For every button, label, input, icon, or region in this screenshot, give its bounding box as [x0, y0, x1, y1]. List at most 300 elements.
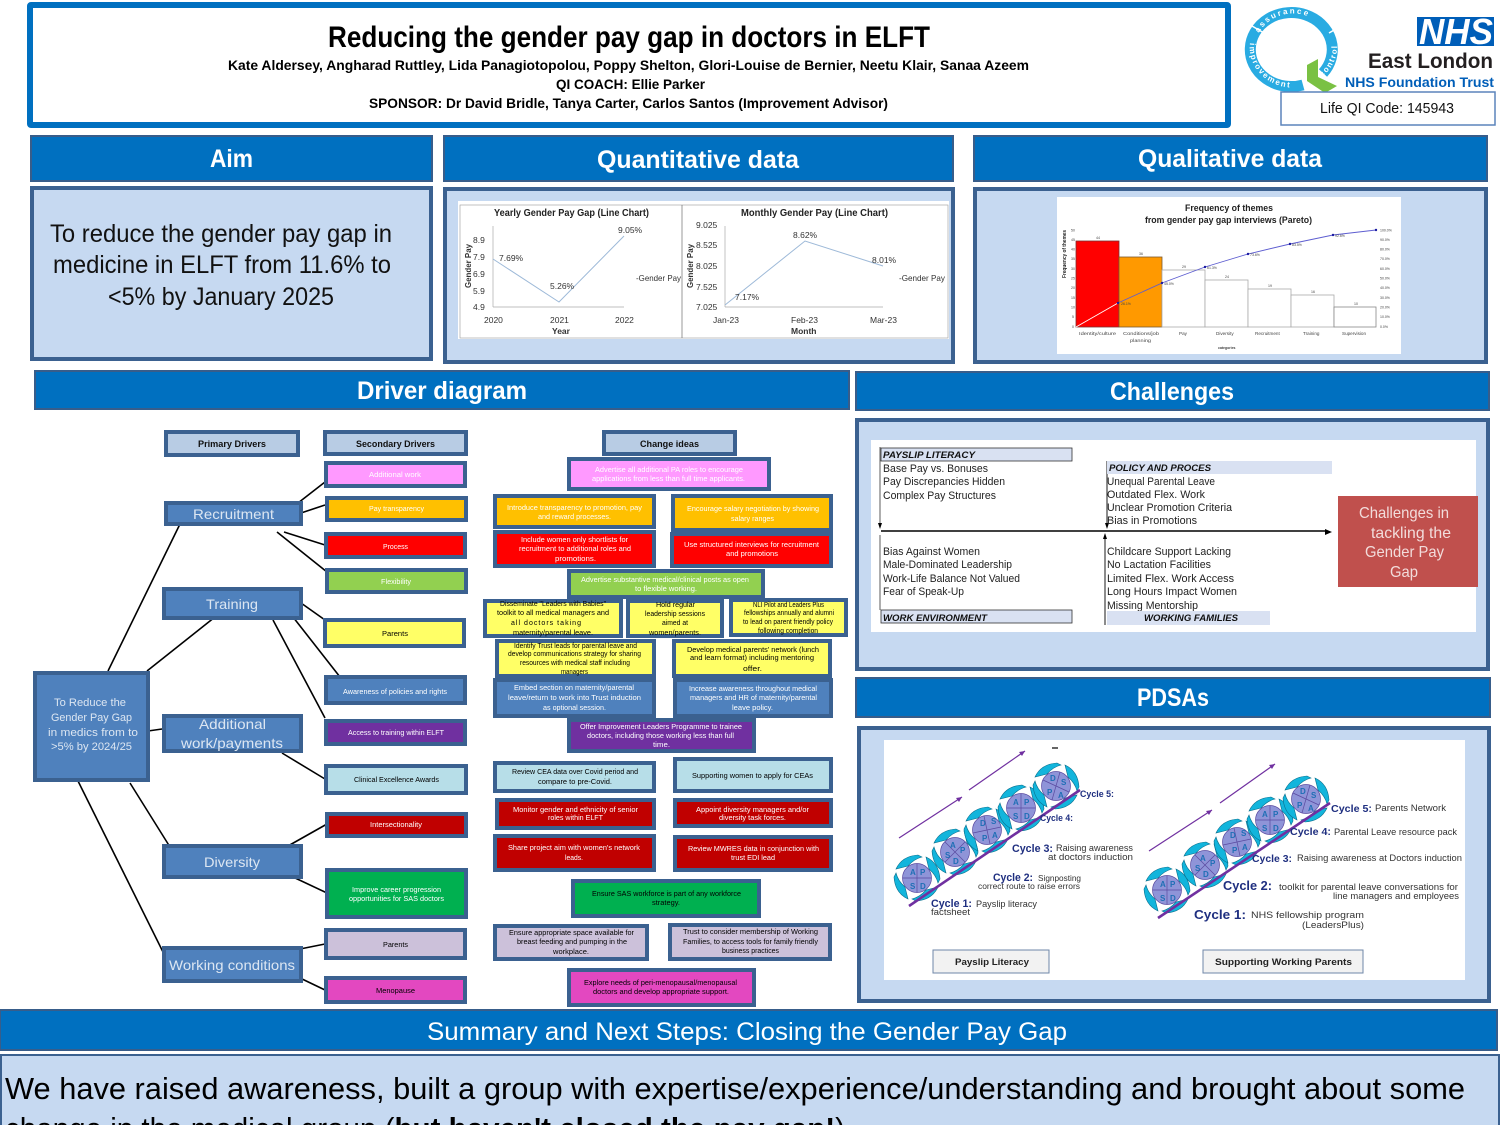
idea: share project aim [495, 836, 654, 870]
QI coach: QI COACH: Ellie Parker [556, 76, 706, 92]
aim statement: <5% by January 2025 [108, 283, 334, 311]
aim statement: medicine in ELFT from 11.6% to [53, 251, 391, 279]
cycle labels: working parents [1194, 803, 1462, 930]
summary text [5, 1071, 1465, 1125]
list: working families: Long Hours Impact Women [1107, 586, 1237, 598]
aim statement: To reduce the gender pay gap in [50, 220, 392, 248]
idea: diversity managers [675, 800, 831, 826]
pareto chart: 20.0% [1380, 306, 1390, 310]
idea: parents network: Develop medical parents' network (lunch [687, 647, 819, 654]
logo: quality assurance ring [1244, 7, 1338, 92]
list: work environment [883, 546, 1020, 598]
PDSA ramp: payslip literacy: A [1058, 791, 1064, 800]
idea: transparency: and reward processes. [538, 514, 611, 521]
driver: recruitment [166, 503, 301, 524]
driver: recruitment: Recruitment [193, 506, 274, 522]
callout: challenges: Gap [1390, 564, 1418, 581]
idea: fellowships: fellowships annually and alumni [744, 610, 834, 617]
Life QI code box: Life QI Code: 145943 [1320, 101, 1454, 117]
pareto chart: 10 [1354, 302, 1358, 306]
goal box: Gender Pay Gap [51, 712, 132, 724]
idea: supporting women CEAs [675, 759, 831, 791]
idea: flexible working: Advertise substantive medical/clinical posts as open [581, 577, 749, 584]
idea: salary negotiation [673, 496, 831, 530]
awareness of policies: Awareness of policies and rights [343, 689, 448, 696]
PDSA ramp: payslip literacy: P [960, 846, 966, 855]
pareto chart: 92.6% [1335, 234, 1345, 238]
callout: challenges: Challenges in [1359, 505, 1449, 522]
heading: challenges: Challenges [1110, 378, 1234, 406]
idea: flexible working: to flexible working. [635, 586, 697, 593]
pareto chart: 30 [1071, 267, 1075, 271]
header: primary drivers: Primary Drivers [198, 439, 266, 450]
list: working families: No Lactation Facilities [1107, 559, 1211, 571]
summary text: We have raised awareness, built a group with expertise/experience/understanding and brought about some [5, 1071, 1465, 1106]
PDSA ramp: payslip literacy: D [980, 819, 986, 828]
idea: structured interviews: Use structured interviews for recruitment [684, 542, 819, 549]
logo: NHS East London: NHS Foundation Trust [1345, 74, 1494, 90]
idea: identify trust leads: resources with medical staff including [520, 660, 630, 667]
pareto chart: 36 [1139, 252, 1143, 256]
line chart: yearly gender pay gap: 9.05% [618, 225, 643, 235]
PDSA ramp: supporting working parents: A [1200, 854, 1206, 863]
heading: challenges [856, 372, 1489, 410]
panel: qualitative data [974, 136, 1487, 362]
idea: monitor gender: Monitor gender and ethnicity of senior [513, 807, 639, 814]
pareto chart: 24 [1225, 275, 1229, 279]
idea: menopause: Explore needs of peri-menopausal/menopausal [584, 980, 737, 987]
idea: share project aim: Share project aim with women's network [508, 845, 641, 852]
cycle labels: payslip literacy: Payslip literacy [976, 899, 1037, 909]
idea: breast feeding space: workplace. [552, 949, 589, 956]
logo: NHS East London: East London [1368, 50, 1493, 73]
pareto chart: Training [1303, 331, 1320, 336]
awareness of policies [326, 677, 465, 703]
pareto chart: Frequency of themes [1062, 230, 1068, 278]
button: supporting working parents: Supporting Working Parents [1215, 957, 1352, 968]
list: payslip literacy: Complex Pay Structures [883, 490, 996, 502]
heading: qualitative [974, 136, 1487, 181]
improve career progression [327, 870, 466, 917]
pareto chart: 29 [1182, 265, 1186, 269]
primary drivers [164, 432, 301, 981]
line chart: yearly gender pay gap: 2020 [484, 315, 503, 325]
title: Reducing the gender pay gap in doctors in ELFT [328, 21, 930, 54]
process: Process [383, 544, 408, 551]
idea: working families [670, 925, 830, 959]
heading: qualitative: Qualitative data [1138, 145, 1323, 173]
idea: SAS workforce: Ensure SAS workforce is part of any workforce [592, 891, 741, 898]
callout: challenges [1338, 496, 1478, 587]
panel: summary and next steps [0, 1010, 1499, 1125]
sponsor: SPONSOR: Dr David Bridle, Tanya Carter, Carlos Santos (Improvement Advisor) [369, 95, 888, 111]
callout: challenges: tackling the [1371, 525, 1451, 542]
idea: CEA data: compare to pre-Covid. [538, 779, 612, 786]
list: work environment: Work-Life Balance Not Valued [883, 573, 1020, 585]
pareto chart: 61.3% [1207, 266, 1217, 270]
panel: driver diagram [35, 371, 849, 1005]
category: policy and proces: POLICY AND PROCES [1109, 463, 1212, 474]
process [326, 534, 465, 557]
Life QI code box [1281, 92, 1495, 125]
list: policy and process [1107, 476, 1233, 527]
improve career progression: Improve career progression [352, 887, 441, 894]
idea: leaders with babies: all doctors taking [511, 620, 581, 627]
logo: NHS East London [1345, 11, 1494, 90]
line chart: monthly gender pay: Feb-23 [791, 315, 818, 325]
category: work environment [881, 610, 1072, 624]
cycle labels: payslip literacy: Cycle 1: [931, 898, 972, 910]
pareto chart: 83.5% [1292, 243, 1302, 247]
idea: leaders with babies [485, 601, 621, 637]
idea: flexible working [569, 571, 763, 597]
pareto chart: Supervision [1342, 331, 1366, 336]
line chart: monthly gender pay: Mar-23 [870, 315, 897, 325]
idea: leaders with babies: maternity/parental leave. [513, 630, 593, 637]
change ideas [485, 432, 846, 1005]
pareto chart: Conditions/job [1123, 331, 1160, 336]
PDSA ramp: payslip literacy: D [953, 857, 959, 866]
header: primary drivers [166, 432, 298, 455]
logo: quality assurance ring: assurance [1256, 9, 1308, 32]
PDSA ramp: payslip literacy: P [1024, 798, 1030, 807]
category: policy and proces [1107, 461, 1332, 474]
cycle labels: payslip literacy: correct route to raise errors [978, 882, 1080, 891]
idea: women only shortlists: promotions. [555, 556, 596, 563]
menopause: Menopause [376, 988, 415, 995]
idea: diversity managers: Appoint diversity managers and/or [696, 807, 810, 814]
driver: additional work/payments: Additional [199, 716, 266, 732]
idea: identify trust leads [497, 641, 654, 676]
category: working families [1107, 611, 1270, 625]
idea: advertise PA roles: applications from less than full time applicants. [592, 476, 745, 483]
driver: additional work/payments: work/payments [180, 735, 283, 751]
PDSA ramp: supporting working parents [1144, 764, 1462, 973]
list: working families: Childcare Support Lacking [1107, 546, 1231, 558]
idea: CEA data [495, 763, 654, 791]
additional work [326, 463, 465, 486]
idea: improvement leaders: doctors, including those working less than full [587, 733, 734, 740]
idea: advertise PA roles: Advertise all additional PA roles to encourage [595, 467, 743, 474]
PDSA ramp: supporting working parents: S [1262, 824, 1268, 833]
pareto chart: 40 [1071, 248, 1075, 252]
idea: identify trust leads: develop communications strategy for sharing [508, 651, 641, 658]
list: work environment: Fear of Speak-Up [883, 586, 964, 598]
cycle labels: payslip literacy: at doctors induction [1048, 852, 1133, 862]
pareto chart: 73.6% [1250, 253, 1260, 257]
PDSA ramp: supporting working parents: A [1242, 843, 1248, 852]
callout: challenges: Gender Pay [1365, 544, 1444, 561]
category: payslip literacy [881, 448, 1072, 461]
idea: menopause [569, 970, 754, 1005]
list: payslip literacy: Base Pay vs. Bonuses [883, 463, 988, 475]
pareto chart: 80.0% [1380, 248, 1390, 252]
PDSA ramp: payslip literacy: P [982, 834, 988, 843]
driver: training: Training [206, 596, 258, 612]
panel: challenges [856, 372, 1489, 669]
PDSA ramp: supporting working parents: P [1273, 810, 1279, 819]
idea: transparency [495, 496, 654, 527]
cycle labels: payslip literacy: Signposting [1038, 874, 1081, 883]
pareto chart: 35 [1071, 257, 1075, 261]
list: working families [1107, 546, 1237, 612]
idea: women only shortlists: Include women only shortlists for [521, 537, 629, 544]
PDSA ramp: supporting working parents: D [1300, 787, 1306, 796]
PDSA ramp: payslip literacy: S [945, 851, 951, 860]
line chart: monthly gender pay: -Gender Pay [899, 273, 946, 283]
idea: CEA data: Review CEA data over Covid period and [512, 769, 638, 776]
PDSA ramp: supporting working parents: D [1273, 824, 1279, 833]
idea: working families: Trust to consider membership of Working [683, 929, 818, 936]
line chart: yearly gender pay gap: 2021 [550, 315, 569, 325]
idea: salary negotiation: salary ranges [731, 516, 775, 523]
pareto chart: 50.0% [1380, 276, 1390, 280]
authors: Kate Aldersey, Angharad Ruttley, Lida Panagiotopolou, Poppy Shelton, Glori-Louise de Bernier, Neetu Klair, Sanaa Azeem [228, 57, 1029, 73]
heading: PDSAs [856, 678, 1490, 717]
goal box [35, 673, 148, 780]
PDSA ramp: payslip literacy: D [920, 882, 926, 891]
PDSA ramp: supporting working parents: D [1170, 894, 1176, 903]
heading: aim [31, 136, 432, 181]
cycle labels: working parents: Cycle 4: [1290, 827, 1331, 838]
pareto chart: 100.0% [1380, 228, 1392, 232]
pareto chart [1062, 203, 1392, 350]
idea: improvement leaders: time. [653, 742, 670, 749]
parents (working conditions) [326, 930, 465, 958]
list: working families: Missing Mentorship [1107, 600, 1198, 612]
parents: Parents [382, 631, 409, 638]
PDSA ramp: payslip literacy: A [992, 831, 998, 840]
idea: monitor gender: roles within ELFT [548, 815, 604, 822]
idea: increase awareness: managers and HR of maternity/parental [690, 695, 817, 702]
pareto chart: Identity/culture [1079, 331, 1117, 336]
clinical excellence awards [326, 766, 466, 793]
pareto chart: 45 [1071, 238, 1075, 242]
line chart: monthly gender pay: 7.525 [696, 282, 718, 292]
heading: quantitative: Quantitative data [597, 146, 800, 174]
pareto chart: 45.0% [1164, 282, 1174, 286]
PDSA ramp: supporting working parents: A [1262, 810, 1268, 819]
idea: MWRES data: trust EDI lead [731, 855, 775, 862]
driver: diversity: Diversity [204, 854, 260, 870]
access to training: Access to training within ELFT [348, 730, 445, 737]
parents [325, 620, 464, 646]
idea: leadership sessions: leadership sessions [645, 611, 705, 618]
idea: parents network: and learn format) including mentoring [690, 655, 814, 662]
idea: identify trust leads: managers [561, 669, 588, 676]
heading: summary: Summary and Next Steps: Closing the Gender Pay Gap [427, 1018, 1067, 1046]
pareto chart: 70.0% [1380, 257, 1390, 261]
PDSA ramp: payslip literacy: D [1024, 812, 1030, 821]
line chart: monthly gender pay: Jan-23 [713, 315, 739, 325]
line chart: yearly gender pay gap: 7.9 [473, 252, 485, 262]
idea: women only shortlists [495, 532, 654, 566]
idea: breast feeding space: Ensure appropriate space available for [509, 930, 635, 937]
pareto chart: 10 [1071, 306, 1075, 310]
idea: leadership sessions: Hold regular [656, 602, 696, 609]
line chart: monthly gender pay: 8.025 [696, 261, 718, 271]
list: payslip literacy [883, 463, 1005, 502]
list: work environment: Male-Dominated Leadership [883, 559, 1012, 571]
cycle labels: working parents: Parents Network [1375, 803, 1447, 813]
pareto chart: 25 [1071, 276, 1075, 280]
PDSA ramp: supporting working parents: S [1311, 791, 1317, 800]
idea: leadership sessions [628, 601, 722, 637]
idea: leaders with babies: toolkit to all medical managers and [497, 610, 609, 617]
line chart: monthly gender pay: Gender Pay [685, 244, 695, 288]
cycle labels: working parents: NHS fellowship program [1251, 910, 1364, 920]
idea: fellowships: to lead on parent friendly policy [743, 619, 833, 626]
idea: fellowships: following completion [758, 628, 818, 635]
line chart: monthly gender pay: 8.62% [793, 230, 818, 240]
cycle labels: payslip literacy: Cycle 2: [993, 872, 1033, 884]
panel: PDSAs [856, 678, 1490, 1001]
cycle labels: working parents: Raising awareness at Doctors induction [1297, 853, 1462, 863]
logo: quality assurance ring: control [1322, 46, 1338, 74]
line chart: yearly gender pay gap: Gender Pay [463, 244, 473, 288]
pareto chart: 60.0% [1380, 267, 1390, 271]
PDSA ramp: payslip literacy [894, 747, 1133, 973]
heading: summary [0, 1010, 1497, 1050]
PDSA ramp: supporting working parents: P [1232, 846, 1238, 855]
secondary drivers [325, 432, 466, 1002]
menopause [326, 978, 465, 1002]
heading: quantitative [444, 136, 953, 181]
pareto chart: Frequency of themes [1185, 203, 1273, 214]
idea: parents network: offer. [743, 666, 762, 673]
PDSA ramp: payslip literacy: S [1013, 812, 1019, 821]
line chart: monthly gender pay: Month [791, 326, 816, 336]
PDSA ramp: payslip literacy: S [1061, 778, 1067, 787]
pareto chart: 44 [1096, 236, 1100, 240]
idea: women only shortlists: recruitment to additional roles and [519, 546, 631, 553]
additional work: Additional work [369, 472, 422, 479]
pareto chart: 50 [1071, 228, 1075, 232]
line chart: yearly gender pay gap: 4.9 [473, 302, 485, 312]
goal box: in medics from to [48, 727, 138, 739]
pareto chart: 16 [1311, 290, 1315, 294]
flexibility [327, 570, 466, 592]
button: supporting working parents [1203, 950, 1363, 973]
pareto chart: 19 [1268, 284, 1272, 288]
line chart: yearly gender pay gap: 6.9 [473, 269, 485, 279]
PDSA ramp: supporting working parents: D [1203, 870, 1209, 879]
idea: fellowships: NLI Pilot and Leaders Plus [753, 602, 824, 609]
line chart: yearly gender pay gap: 8.9 [473, 235, 485, 245]
list: payslip literacy: Pay Discrepancies Hidden [883, 476, 1005, 488]
line chart: monthly gender pay [685, 207, 946, 336]
pareto chart: 0 [1072, 325, 1074, 329]
cycle labels: working parents: (LeadersPlus) [1302, 920, 1364, 930]
cycle labels: payslip literacy: Raising awareness [1056, 843, 1133, 853]
pareto chart: 15 [1071, 296, 1075, 300]
line chart: monthly gender pay: Monthly Gender Pay (Line Chart) [741, 207, 888, 219]
driver: working conditions: Working conditions [169, 957, 295, 973]
pareto chart: Pay [1179, 331, 1188, 336]
category: payslip literacy: PAYSLIP LITERACY [883, 450, 977, 461]
pareto chart: 26.1% [1121, 302, 1131, 306]
driver: training [164, 589, 301, 618]
PDSA ramp: supporting working parents: S [1160, 894, 1166, 903]
connector lines [78, 482, 340, 990]
idea: increase awareness: Increase awareness throughout medical [689, 686, 817, 693]
PDSA ramp: payslip literacy: P [1047, 788, 1053, 797]
header: change ideas [604, 432, 735, 454]
button: payslip literacy [933, 950, 1049, 973]
PDSA ramp: payslip literacy: S [910, 882, 916, 891]
idea: parents network [674, 641, 830, 676]
idea: fellowships [731, 600, 846, 635]
goal box: To Reduce the [54, 697, 126, 709]
cycle labels: working parents: Cycle 3: [1252, 854, 1292, 865]
cycle labels: working parents: Cycle 5: [1331, 804, 1372, 815]
idea: leadership sessions: women/parents. [648, 630, 701, 637]
driver: additional work/payments [164, 716, 301, 751]
cycle labels: payslip literacy [931, 789, 1133, 917]
line chart: yearly gender pay gap: 5.26% [550, 281, 575, 291]
header: secondary drivers: Secondary Drivers [356, 439, 435, 450]
list: policy and process: Unclear Promotion Criteria [1107, 502, 1233, 514]
line chart: monthly gender pay: 9.025 [696, 220, 718, 230]
title panel [30, 5, 1228, 125]
cycle labels: payslip literacy: Cycle 3: [1012, 843, 1053, 855]
PDSA ramp: payslip literacy: P [920, 868, 926, 877]
logo: NHS East London: NHS [1419, 11, 1493, 52]
pareto chart: 0.0% [1380, 325, 1388, 329]
pareto chart: from gender pay gap interviews (Pareto) [1145, 215, 1312, 226]
PDSA ramp: supporting working parents: A [1308, 804, 1314, 813]
PDSA ramp: supporting working parents: S [1195, 864, 1201, 873]
idea: embed section: as optional session. [543, 705, 606, 712]
line chart: yearly gender pay gap [463, 207, 682, 336]
idea: MWRES data [675, 837, 831, 870]
button: payslip literacy: Payslip Literacy [955, 957, 1030, 968]
parents (working conditions): Parents [383, 942, 409, 949]
list: working families: Limited Flex. Work Access [1107, 573, 1234, 585]
category: work environment: WORK ENVIRONMENT [883, 613, 988, 624]
idea: improvement leaders: Offer Improvement Leaders Programme to trainee [580, 724, 742, 731]
line chart: monthly gender pay: 8.01% [872, 255, 897, 265]
idea: leadership sessions: aimed at [662, 620, 688, 627]
panel: quantitative data [444, 136, 953, 362]
cycle labels: payslip literacy: Cycle 5: [1080, 789, 1114, 799]
idea: monitor gender [497, 800, 654, 828]
idea: increase awareness: leave policy. [732, 705, 773, 712]
line chart: monthly gender pay: 7.17% [735, 292, 760, 302]
cycle labels: working parents: line managers and employees [1333, 891, 1460, 901]
intersectionality: Intersectionality [370, 822, 423, 829]
idea: embed section: Embed section on maternity/parental [514, 685, 634, 692]
idea: salary negotiation: Encourage salary negotiation by showing [687, 506, 819, 513]
cycle labels: payslip literacy: Cycle 4: [1040, 813, 1073, 823]
PDSA ramp: supporting working parents: A [1160, 880, 1166, 889]
PDSA ramp: payslip literacy: D [1050, 774, 1056, 783]
pareto chart: Diversity [1216, 331, 1234, 336]
idea: identify trust leads: Identify Trust leads for parental leave and [514, 643, 637, 650]
idea: transparency: Introduce transparency to promotion, pay [507, 505, 643, 512]
heading: driver diagram: Driver diagram [357, 377, 527, 405]
line chart: yearly gender pay gap: 2022 [615, 315, 634, 325]
heading: PDSAs: PDSAs [1137, 684, 1209, 712]
pareto chart: 10.0% [1380, 315, 1390, 319]
PDSA ramp: payslip literacy: A [910, 868, 916, 877]
list: policy and process: Outdated Flex. Work [1107, 489, 1205, 501]
idea: working families: business practices [722, 948, 779, 955]
idea: menopause: doctors and develop appropriate support. [593, 989, 729, 996]
idea: leaders with babies: Disseminate "Leaders with Babies" [500, 601, 607, 608]
idea: share project aim: leads. [565, 855, 583, 862]
pay transparency: Pay transparency [369, 506, 424, 513]
